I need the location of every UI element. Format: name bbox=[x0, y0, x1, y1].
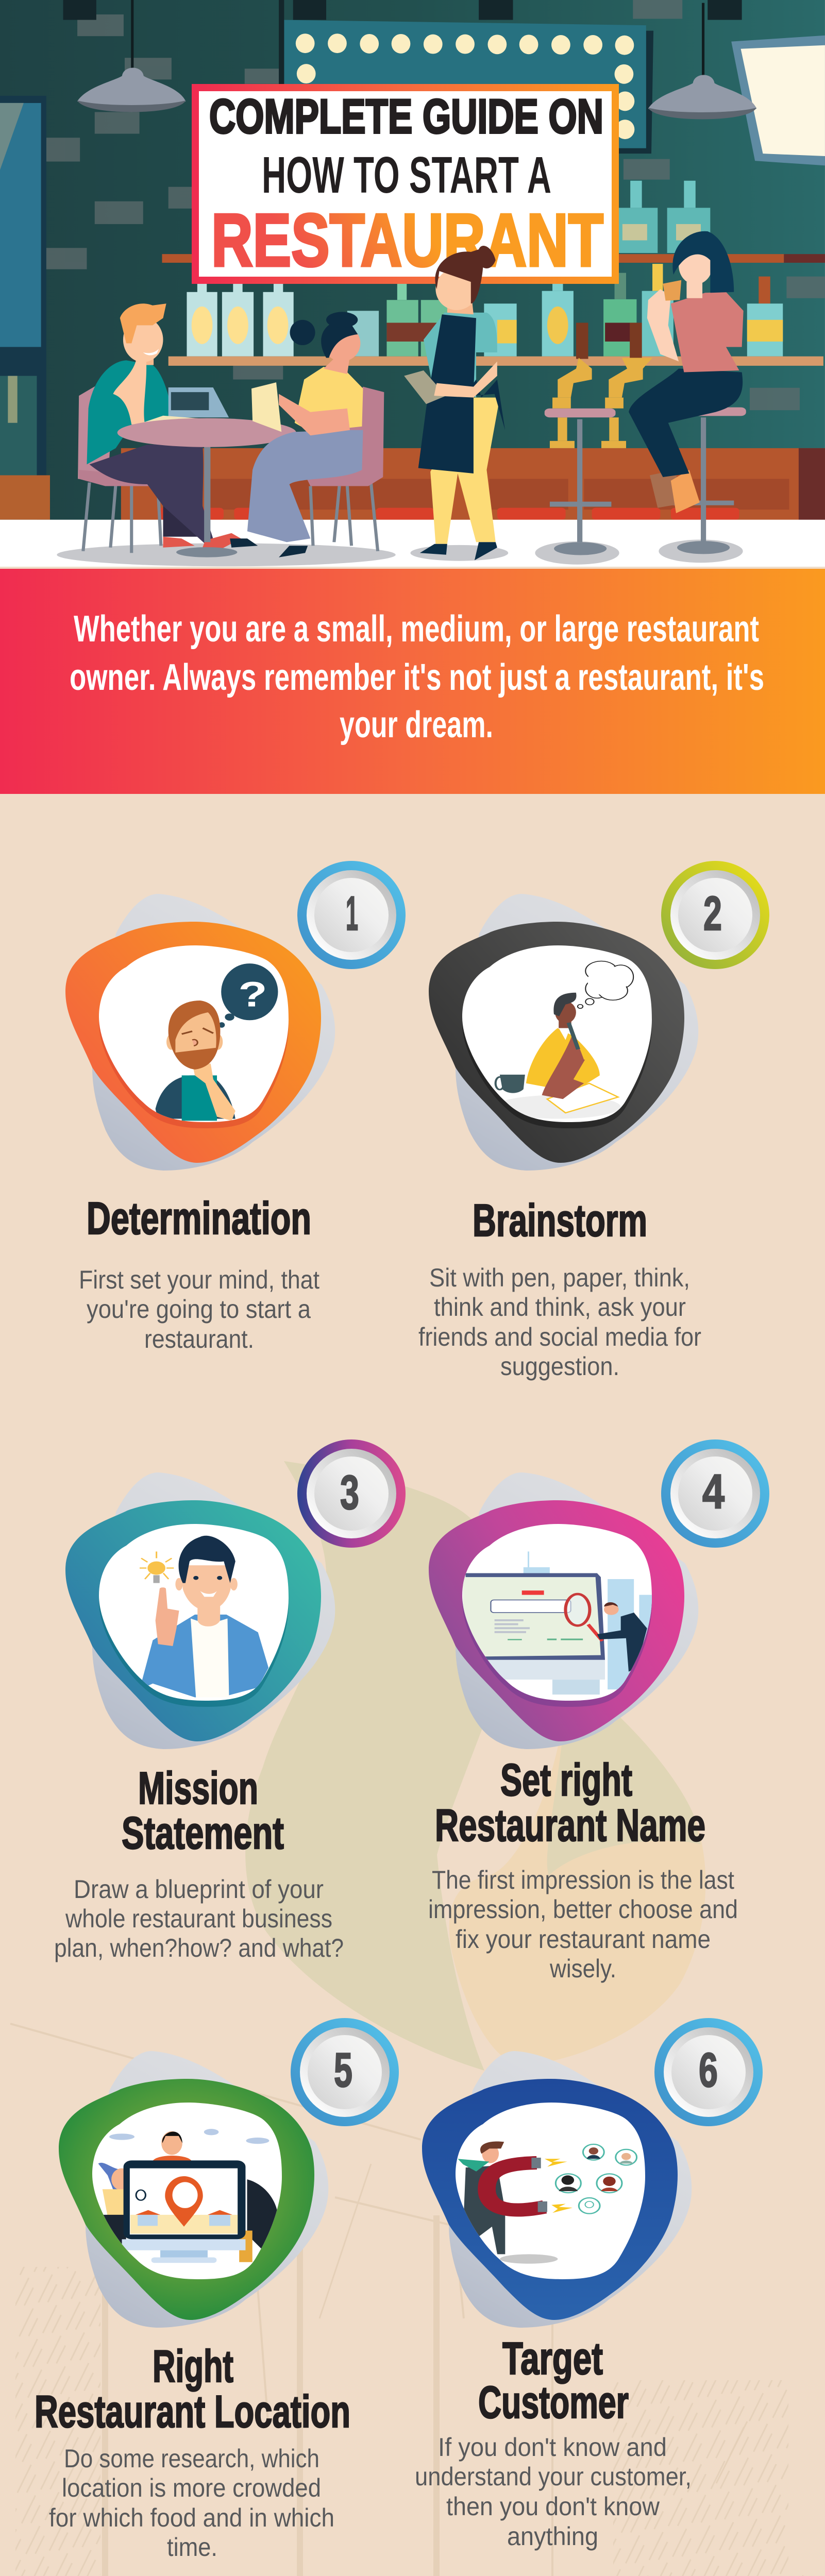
ceiling spots bbox=[63, 0, 742, 20]
step 4 description bbox=[428, 1866, 738, 1983]
title line 1: COMPLETE GUIDE ON bbox=[209, 89, 603, 143]
band background bbox=[0, 569, 825, 794]
step 4 heading: Restaurant Name bbox=[435, 1800, 705, 1851]
title box bbox=[195, 88, 615, 282]
step 6 shield bbox=[422, 2051, 692, 2328]
upper bottles bbox=[619, 181, 710, 253]
intro band bbox=[0, 569, 825, 794]
step 6 heading bbox=[478, 2333, 629, 2428]
step 2 number badge bbox=[661, 861, 769, 969]
intro text: your dream. bbox=[340, 704, 493, 745]
step 6 number badge: 6 bbox=[699, 2043, 718, 2097]
step 5 description: time. bbox=[167, 2533, 217, 2562]
step 6 heading: Target bbox=[502, 2333, 603, 2384]
upper shelf bbox=[162, 254, 784, 263]
step 6 number badge bbox=[654, 2018, 763, 2126]
title line 3: RESTAURANT bbox=[211, 198, 603, 282]
step 3 shield bbox=[65, 1472, 335, 1749]
icon: customer magnet bbox=[458, 2141, 637, 2264]
lower shelf bbox=[169, 357, 823, 366]
lower shelf bottles bbox=[187, 264, 783, 357]
step 1 heading: Determination bbox=[87, 1193, 311, 1244]
step 5 heading: Right bbox=[153, 2341, 233, 2392]
wall bbox=[0, 0, 825, 520]
step 5 number badge: 5 bbox=[334, 2043, 352, 2097]
step 3 description: plan, when?how? and what? bbox=[54, 1934, 344, 1962]
step 5 description: for which food and in which bbox=[49, 2503, 334, 2532]
step 3 number badge: 3 bbox=[340, 1465, 359, 1519]
step 6 description: If you don't know and bbox=[438, 2433, 667, 2462]
step 5 heading: Restaurant Location bbox=[35, 2386, 350, 2437]
marquee sign bbox=[279, 0, 653, 154]
step 4 heading: Set right bbox=[500, 1754, 632, 1805]
step 2 description bbox=[418, 1263, 701, 1381]
step 5 number badge bbox=[291, 2018, 399, 2126]
step 4 description: wisely. bbox=[549, 1954, 616, 1983]
step 1 shield bbox=[65, 894, 335, 1171]
table bbox=[117, 418, 296, 557]
wall bricks bbox=[45, 0, 825, 410]
hero: bar scene bbox=[0, 0, 825, 567]
step 1 description bbox=[79, 1265, 319, 1353]
step 2 description: think and think, ask your bbox=[434, 1293, 686, 1321]
step 3 heading: Statement bbox=[122, 1807, 284, 1858]
step 1 description: you're going to start a bbox=[87, 1295, 311, 1324]
step 6 description bbox=[415, 2433, 692, 2551]
title box frame bbox=[195, 88, 615, 280]
icon: man brainstorming bbox=[495, 961, 633, 1119]
waitress bbox=[404, 246, 505, 560]
floor bbox=[0, 520, 825, 567]
step 5 heading bbox=[35, 2341, 350, 2437]
step 5 description: Do some research, which bbox=[64, 2444, 319, 2473]
man at table bbox=[78, 303, 241, 555]
step 3 panel bbox=[54, 1439, 406, 1962]
watermark: upper leaf logo bbox=[245, 1461, 705, 2071]
step 2 description: Sit with pen, paper, think, bbox=[429, 1263, 690, 1292]
step 5 description: location is more crowded bbox=[62, 2473, 321, 2502]
step 4 description: impression, better choose and bbox=[428, 1895, 738, 1924]
step 6 description: anything bbox=[507, 2522, 598, 2551]
left chair stub bbox=[0, 475, 50, 520]
icon: thinking man: ? bbox=[238, 975, 267, 1014]
hero illustration bbox=[0, 0, 825, 567]
step 6 description: then you don't know bbox=[446, 2492, 660, 2521]
step 4 panel bbox=[428, 1439, 769, 1983]
step 2 description: suggestion. bbox=[500, 1352, 619, 1381]
step 3 description bbox=[54, 1875, 344, 1962]
intro text bbox=[70, 608, 764, 745]
step 4 description: fix your restaurant name bbox=[456, 1925, 711, 1954]
step 3 heading: Mission bbox=[138, 1762, 258, 1814]
step 1 description: restaurant. bbox=[144, 1325, 254, 1353]
pendant lamp left bbox=[77, 0, 186, 112]
step 5 shield bbox=[59, 2051, 328, 2328]
icon: thinking man bbox=[156, 963, 278, 1121]
step 4 description: The first impression is the last bbox=[432, 1866, 734, 1894]
icon: map pin on monitor bbox=[98, 2129, 279, 2263]
step 2 description: friends and social media for bbox=[418, 1323, 701, 1351]
step 2 shield bbox=[429, 894, 698, 1171]
step 3 number badge bbox=[297, 1439, 406, 1548]
step 1 number badge bbox=[297, 861, 406, 969]
step 3 description: Draw a blueprint of your bbox=[74, 1875, 324, 1904]
pendant lamp right bbox=[648, 3, 756, 119]
step 5 description bbox=[49, 2444, 334, 2562]
icon: man with idea bbox=[140, 1536, 268, 1697]
left door panel bbox=[0, 96, 46, 520]
back counter bbox=[121, 448, 825, 520]
beer taps bbox=[550, 323, 652, 448]
watermark: building sketch bbox=[10, 2024, 804, 2576]
step 1 panel bbox=[65, 861, 406, 1353]
step 5 panel bbox=[35, 2018, 399, 2562]
step 4 heading bbox=[435, 1754, 705, 1851]
step 4 shield bbox=[429, 1472, 698, 1749]
step 2 panel bbox=[418, 861, 769, 1381]
step 3 heading bbox=[122, 1762, 284, 1858]
step 1 description: First set your mind, that bbox=[79, 1265, 319, 1294]
step 2 heading: Brainstorm bbox=[473, 1195, 647, 1246]
floor shadows bbox=[57, 539, 743, 566]
stool left bbox=[545, 409, 616, 555]
step 6 heading: Customer bbox=[478, 2377, 629, 2428]
woman on stool bbox=[629, 231, 744, 513]
title line 2: HOW TO START A bbox=[262, 146, 551, 204]
step 3 description: whole restaurant business bbox=[65, 1904, 332, 1933]
step 4 number badge: 4 bbox=[702, 1464, 725, 1518]
woman with menu bbox=[230, 312, 384, 557]
step 4 number badge bbox=[661, 1439, 769, 1548]
step 6 panel bbox=[415, 2018, 763, 2551]
step 1 number badge: 1 bbox=[346, 886, 358, 940]
window bbox=[731, 36, 825, 165]
step 6 description: understand your customer, bbox=[415, 2462, 692, 2491]
stool right bbox=[671, 408, 746, 554]
icon: restaurant name search bbox=[463, 1551, 655, 1694]
step 2 number badge: 2 bbox=[703, 886, 722, 940]
